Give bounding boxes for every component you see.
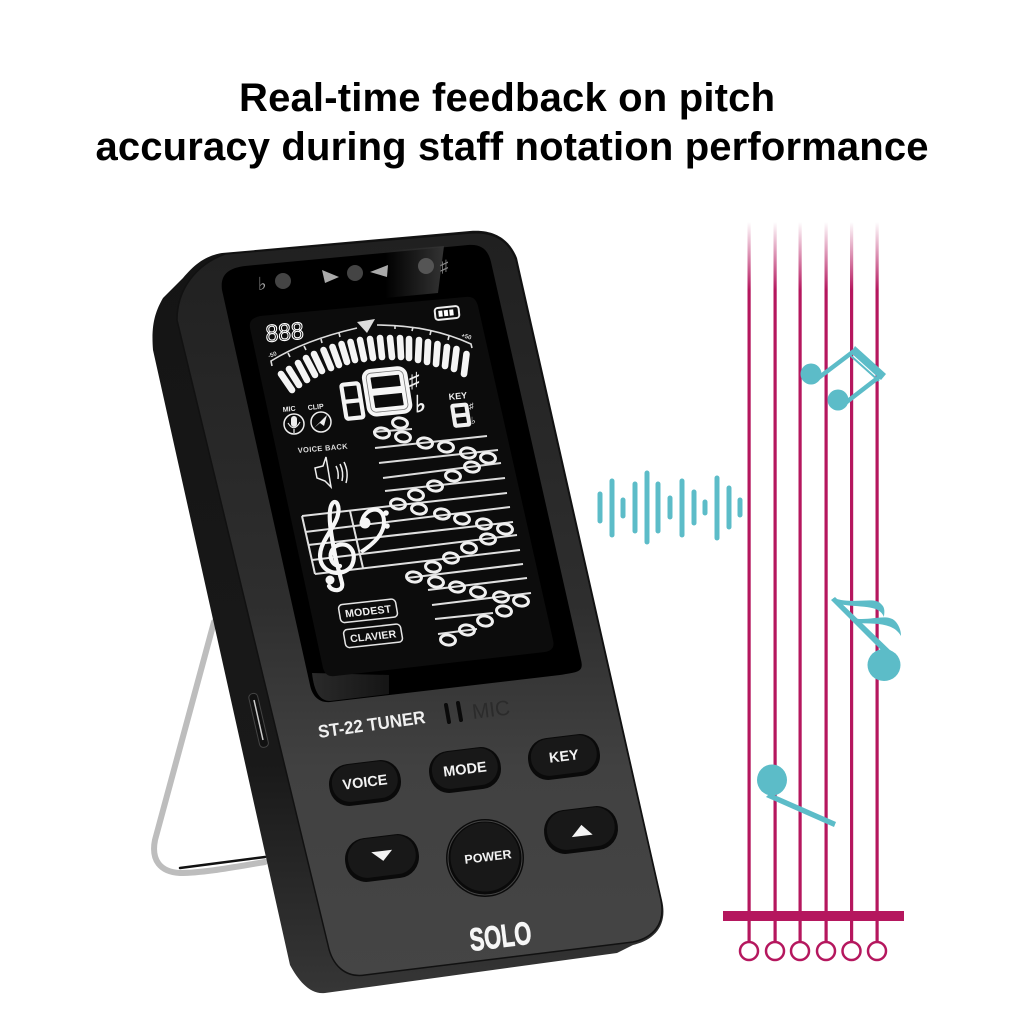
brand logo: SOLO <box>467 915 533 958</box>
usb port <box>248 693 269 748</box>
black glass screen <box>222 245 582 702</box>
display: tuning meter bars <box>281 338 466 390</box>
display: voice back label: VOICE BACK <box>297 442 349 455</box>
button: mode <box>427 745 503 795</box>
staff bar <box>723 911 904 921</box>
display: counter 888: 888 <box>265 318 304 348</box>
quarter note <box>757 764 836 827</box>
device front face <box>177 233 662 975</box>
display: cents scale <box>271 325 472 366</box>
staff strings <box>748 222 879 944</box>
display: small digit <box>341 383 364 419</box>
display: mic and clip icons <box>282 403 331 434</box>
model label: ST-22 TUNER <box>317 707 427 742</box>
string pegs <box>740 942 886 960</box>
display: large digit <box>365 370 409 413</box>
display: clavier badge <box>343 624 403 648</box>
display: sharp and flat: ♯ <box>409 369 420 392</box>
button: key: KEY <box>548 747 580 767</box>
display: note heads <box>374 417 529 646</box>
display: bass clef <box>360 510 390 552</box>
display: mic and clip icons: CLIP <box>307 403 324 412</box>
display: scale labels: +50 <box>460 333 473 342</box>
display: sharp and flat <box>409 369 426 417</box>
button: mode: MODE <box>442 759 488 781</box>
display: clavier badge: CLAVIER <box>349 628 398 645</box>
display: battery icon <box>434 306 460 320</box>
button: voice <box>327 758 403 808</box>
metal kickstand <box>154 622 265 873</box>
sixteenth note <box>831 597 901 681</box>
display: pitch pointer <box>357 319 375 333</box>
lcd display <box>250 297 554 676</box>
display: key indicator: ♯ <box>469 401 474 411</box>
display: key indicator: KEY <box>448 390 468 402</box>
button: key <box>526 732 602 782</box>
display: speaker icon <box>315 457 347 487</box>
display: key indicator: ♭ <box>471 416 476 427</box>
display: lower staff lines <box>407 564 531 634</box>
microphone holes <box>446 703 461 722</box>
status indicators: ♯ <box>440 257 449 276</box>
display: treble clef <box>320 502 354 590</box>
button: power: POWER <box>464 847 512 867</box>
device side shell <box>152 231 663 993</box>
sound wave <box>600 473 740 542</box>
status indicators <box>258 257 449 294</box>
button: power <box>446 819 524 897</box>
mic label: MIC <box>471 697 511 724</box>
display: scale labels <box>268 333 473 360</box>
display: scale labels: -50 <box>268 351 278 360</box>
beamed eighth notes <box>800 346 886 410</box>
title <box>96 76 928 169</box>
display: sharp and flat: ♭ <box>415 391 426 417</box>
button: voice: VOICE <box>342 772 389 794</box>
glass reflection top <box>385 246 444 298</box>
display: upper staff lines <box>373 429 505 491</box>
display: modest badge <box>338 599 398 623</box>
display: modest badge: MODEST <box>344 603 393 620</box>
title: accuracy during staff notation performance <box>96 125 928 169</box>
button: down arrow <box>343 832 421 884</box>
title: Real-time feedback on pitch <box>239 76 775 120</box>
status indicators: ♭ <box>258 274 266 294</box>
display: key indicator <box>448 390 476 427</box>
glass reflection bottom <box>312 673 389 701</box>
display: main staff lines <box>302 493 520 574</box>
display: mic and clip icons: MIC <box>282 406 296 414</box>
tuner device <box>152 231 663 993</box>
button: up arrow <box>542 804 620 856</box>
